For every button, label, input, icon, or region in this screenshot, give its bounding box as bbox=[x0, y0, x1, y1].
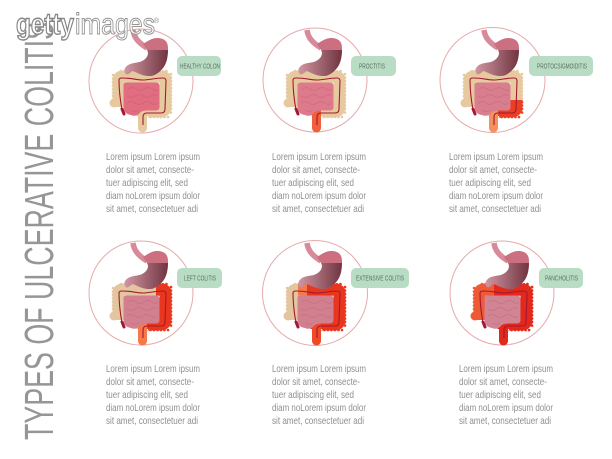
description text: tuer adipiscing elit, sed bbox=[106, 389, 188, 401]
panel: extensive colitis bbox=[262, 240, 409, 427]
panel: proctitis bbox=[263, 28, 396, 215]
description text: sit amet, consectetuer adi bbox=[106, 415, 198, 427]
circle outline bbox=[450, 241, 554, 345]
tag: pancholitis: PANCHOLITIS bbox=[545, 276, 578, 282]
illustration: digestive system bbox=[110, 243, 171, 341]
description text: dolor sit amet, consecte- bbox=[106, 376, 194, 388]
tag: healthy colon: HEALTHY COLON bbox=[180, 64, 220, 70]
description text: diam noLorem ipsum dolor bbox=[106, 190, 200, 202]
description text: sit amet, consectetuer adi bbox=[449, 203, 541, 215]
description text: diam noLorem ipsum dolor bbox=[449, 190, 543, 202]
tag: protosigmoiditis bbox=[529, 56, 593, 76]
illustration: digestive system bbox=[460, 30, 522, 128]
description text: Lorem ipsum Lorem ipsum bbox=[272, 151, 366, 163]
description text: Lorem ipsum Lorem ipsum bbox=[449, 151, 543, 163]
description text bbox=[449, 151, 543, 215]
description text: tuer adipiscing elit, sed bbox=[459, 389, 541, 401]
tag: healthy colon bbox=[177, 56, 221, 76]
circle outline bbox=[89, 241, 193, 345]
description text: sit amet, consectetuer adi bbox=[272, 415, 364, 427]
panel: protosigmoiditis bbox=[440, 28, 593, 215]
description text: diam noLorem ipsum dolor bbox=[272, 402, 366, 414]
description text: sit amet, consectetuer adi bbox=[106, 203, 198, 215]
description text: dolor sit amet, consecte- bbox=[449, 164, 537, 176]
description text: sit amet, consectetuer adi bbox=[272, 203, 364, 215]
description text bbox=[459, 363, 553, 427]
tag: proctitis: PROCTITIS bbox=[359, 64, 385, 70]
circle outline bbox=[263, 28, 367, 132]
description text: dolor sit amet, consecte- bbox=[272, 376, 360, 388]
illustration: digestive system bbox=[284, 30, 345, 128]
illustration: digestive system bbox=[470, 243, 532, 341]
description text: tuer adipiscing elit, sed bbox=[449, 177, 531, 189]
description text: tuer adipiscing elit, sed bbox=[272, 177, 354, 189]
description text: tuer adipiscing elit, sed bbox=[106, 177, 188, 189]
description text: sit amet, consectetuer adi bbox=[459, 415, 551, 427]
description text: diam noLorem ipsum dolor bbox=[272, 190, 366, 202]
circle outline bbox=[440, 28, 545, 132]
description text: Lorem ipsum Lorem ipsum bbox=[272, 363, 366, 375]
watermark: gettyimages: ® bbox=[154, 17, 160, 25]
description text: diam noLorem ipsum dolor bbox=[459, 402, 553, 414]
description text: tuer adipiscing elit, sed bbox=[272, 389, 354, 401]
description text bbox=[272, 363, 366, 427]
description text: Lorem ipsum Lorem ipsum bbox=[459, 363, 553, 375]
watermark: gettyimages bbox=[16, 8, 160, 41]
watermark: gettyimages: getty bbox=[16, 8, 74, 41]
circle outline bbox=[89, 29, 193, 133]
circle outline bbox=[262, 240, 368, 346]
tag: pancholitis bbox=[539, 268, 583, 288]
description text bbox=[272, 151, 366, 215]
tag: extensive colitis: EXTENSIVE COLITIS bbox=[356, 276, 404, 282]
description text: dolor sit amet, consecte- bbox=[272, 164, 360, 176]
tag: left colitis bbox=[177, 268, 222, 288]
description text bbox=[106, 151, 200, 215]
description text: dolor sit amet, consecte- bbox=[459, 376, 547, 388]
watermark: gettyimages: images bbox=[75, 8, 155, 41]
illustration: digestive system bbox=[284, 243, 345, 341]
tag: extensive colitis bbox=[351, 268, 409, 288]
illustration: digestive system bbox=[110, 30, 171, 128]
tag: proctitis bbox=[351, 56, 396, 76]
tag: protosigmoiditis: PROTOCSIGMOIDITIS bbox=[537, 64, 587, 70]
description text: Lorem ipsum Lorem ipsum bbox=[106, 363, 200, 375]
description text: Lorem ipsum Lorem ipsum bbox=[106, 151, 200, 163]
panel: left colitis bbox=[89, 241, 222, 427]
description text: diam noLorem ipsum dolor bbox=[106, 402, 200, 414]
description text: dolor sit amet, consecte- bbox=[106, 164, 194, 176]
description text bbox=[106, 363, 200, 427]
panel: healthy colon bbox=[89, 29, 221, 215]
tag: left colitis: LEFT COLITIS bbox=[184, 276, 216, 282]
panel: pancholitis bbox=[450, 241, 583, 427]
